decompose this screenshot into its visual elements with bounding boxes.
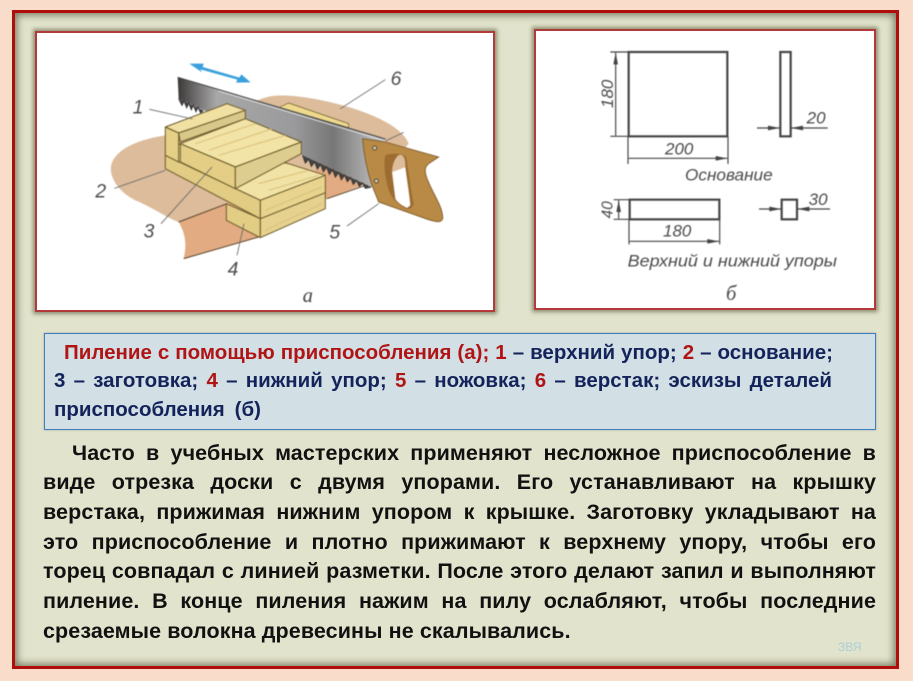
- panel: saw illustration a: [35, 31, 495, 312]
- caption line 3: приспособления (б): [54, 398, 261, 421]
- body text: это приспособление и плотно прижимают к верхнему упору, чтобы его: [43, 530, 876, 554]
- dimension numbers and captions: 20: [806, 108, 826, 127]
- part numbers: 6: [391, 69, 402, 90]
- leader lines: [114, 80, 404, 255]
- label a: а: [303, 285, 313, 307]
- base plate side view: [757, 52, 828, 136]
- stop side view: [759, 200, 830, 219]
- base plate front view: [610, 52, 728, 164]
- dimension numbers and captions: 200: [664, 139, 694, 158]
- workpiece 3: [180, 119, 301, 189]
- dimension numbers and captions: 40: [599, 201, 616, 218]
- dimension numbers and captions: Основание: [685, 166, 773, 185]
- dimension numbers and captions: 30: [809, 190, 828, 209]
- part numbers: 1: [133, 98, 143, 119]
- workbench top: [111, 95, 409, 259]
- dimension numbers and captions: 180: [663, 222, 692, 241]
- body text: верстака, прижимая нижним упором к крышке. Заготовку укладывают на: [43, 500, 876, 524]
- base 2: [165, 144, 325, 219]
- part numbers: 3: [144, 222, 155, 243]
- caption box: [44, 333, 876, 430]
- body text: виде отрезка доски с двумя упорами. Его устанавливают на крышку: [43, 470, 876, 494]
- arrow: saw motion: [189, 64, 251, 83]
- saw handle: [363, 139, 443, 222]
- part numbers: 2: [94, 182, 106, 203]
- part numbers: 4: [228, 259, 239, 280]
- dimension numbers and captions: 180: [598, 79, 617, 108]
- wood grain: [195, 124, 322, 230]
- watermark: ЗВЯ: [838, 640, 862, 654]
- saw blade: [178, 77, 385, 188]
- stop front view: [614, 200, 720, 244]
- lower stop 4: [226, 193, 325, 238]
- dimension numbers and captions: б: [726, 283, 737, 305]
- part numbers: 5: [329, 222, 340, 243]
- dimension numbers and captions: Верхний и нижний упоры: [628, 252, 837, 271]
- body text: Часто в учебных мастерских применяют несложное приспособление в: [72, 441, 876, 465]
- body text: [43, 441, 876, 643]
- body text: срезаемые волокна древесины не скалывались.: [43, 619, 571, 643]
- body text: пиление. В конце пиления нажим на пилу ослабляют, чтобы последние: [43, 589, 876, 613]
- caption line 2: 3 – заготовка; 4 – нижний упор; 5 – ножовка; 6 – верстак; эскизы деталей: [54, 369, 832, 392]
- upper stop 1: [165, 104, 245, 162]
- caption line 1: Пиление с помощью приспособления (а); 1 – верхний упор; 2 – основание;: [64, 341, 833, 364]
- workpiece and stops: [165, 104, 325, 238]
- back block: [280, 103, 349, 128]
- body text: торец совпадал с линией разметки. После этого делают запил и выполняют: [43, 559, 876, 583]
- panel: dimension sketches b: [534, 29, 876, 310]
- dimension numbers and captions: [598, 79, 837, 305]
- part numbers: [94, 69, 402, 280]
